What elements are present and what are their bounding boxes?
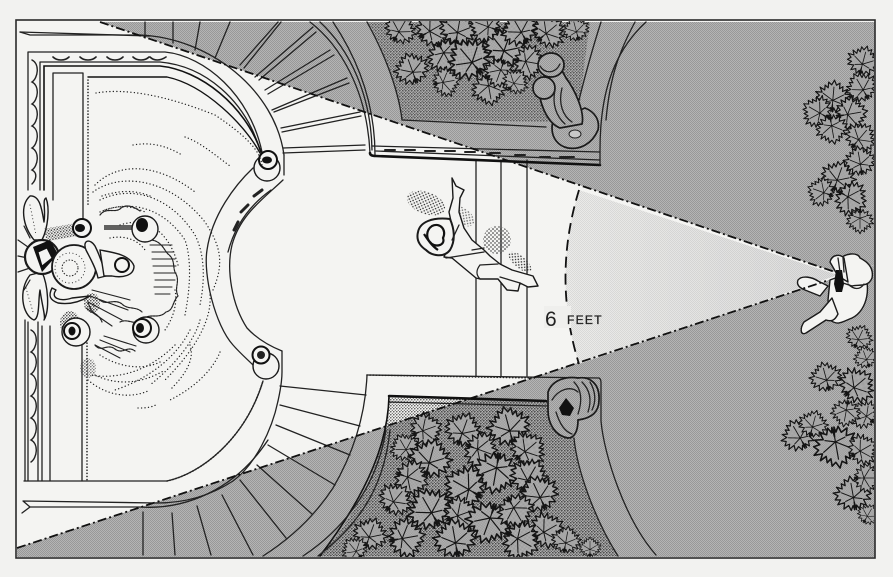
- figure: shadow stipple: [403, 186, 535, 276]
- planter: upper bed stipple: [368, 22, 590, 122]
- 6 feet distance arc: [566, 190, 579, 364]
- fountain terrace: lower walls: [22, 320, 278, 513]
- balustrade ball: upper: [254, 151, 280, 181]
- fountain: splash ripples: [80, 206, 178, 378]
- figure: viewer standing at cone apex: [797, 254, 872, 334]
- planter: lower bed stipple: [320, 396, 618, 556]
- curved bay of the terrace: [206, 155, 284, 401]
- door threshold lines: [476, 160, 527, 376]
- fountain: sculpture with cherub: [18, 196, 134, 320]
- fountain: ball top-right: [132, 216, 158, 242]
- upper shaded zone outside sight cone: [100, 22, 875, 273]
- label: 6 feet: [544, 306, 603, 331]
- figure: person falling in the doorway: [417, 178, 538, 291]
- light sector halftone: [566, 190, 838, 364]
- upper terrace wall: [370, 22, 646, 165]
- sight cone: upper dashed line: [100, 22, 838, 273]
- stairs: outer arch: [310, 22, 402, 155]
- maple planting: lower bed: [342, 406, 602, 557]
- label: 6 feet: FEET: [567, 313, 603, 327]
- fountain: ball bottom-left: [60, 311, 90, 346]
- light sector of sight cone beyond 6 feet: [566, 190, 838, 364]
- stairs: upper steps: [20, 22, 365, 153]
- label: 6 feet: 6: [545, 308, 557, 331]
- sight cone: lower dashed line: [17, 281, 826, 548]
- statue: lower planter flower urn: [548, 378, 599, 438]
- lower shaded zone outside sight cone: [17, 265, 875, 557]
- statue: upper planter: [533, 53, 598, 148]
- maple tree: lower right: [780, 324, 874, 526]
- maple planting: upper bed: [384, 21, 590, 106]
- balustrade ball: lower: [252, 346, 279, 379]
- fountain: ball bottom-right: [133, 317, 159, 343]
- fountain terrace: upper walls: [20, 32, 284, 220]
- lower terrace walls: [263, 375, 656, 556]
- maple tree: upper right: [802, 46, 874, 234]
- fountain: dotted water ripples: [88, 91, 262, 408]
- stairs: lower steps: [143, 386, 366, 555]
